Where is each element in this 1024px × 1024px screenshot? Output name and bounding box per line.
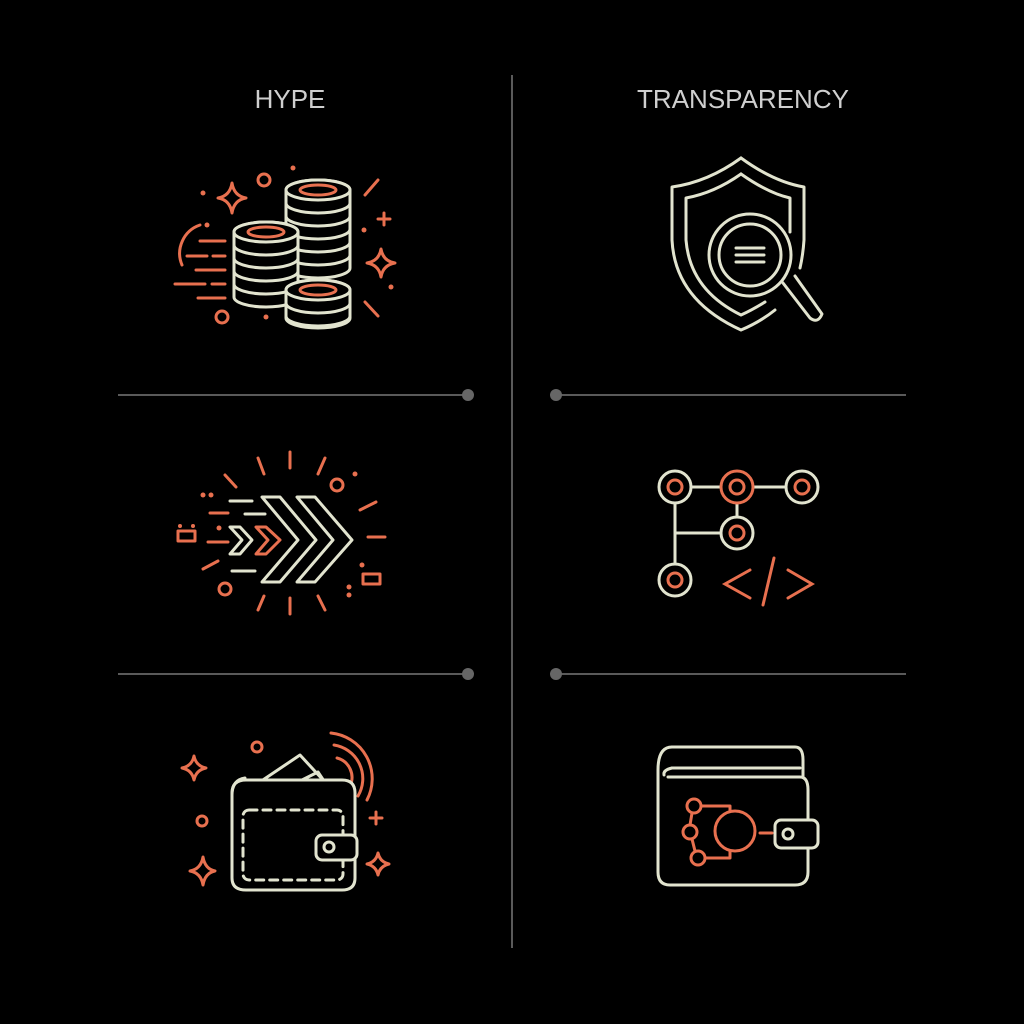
icon: coin stacks xyxy=(175,166,395,328)
icon: crypto wallet xyxy=(658,747,818,885)
title: hype: HYPE xyxy=(255,84,325,114)
title: transparency: TRANSPARENCY xyxy=(637,84,849,114)
icon: wallet with contactless xyxy=(182,733,389,890)
icon: network code xyxy=(659,471,818,605)
icon: chevrons speed xyxy=(178,452,385,614)
icon: shield with magnifier xyxy=(672,158,822,330)
